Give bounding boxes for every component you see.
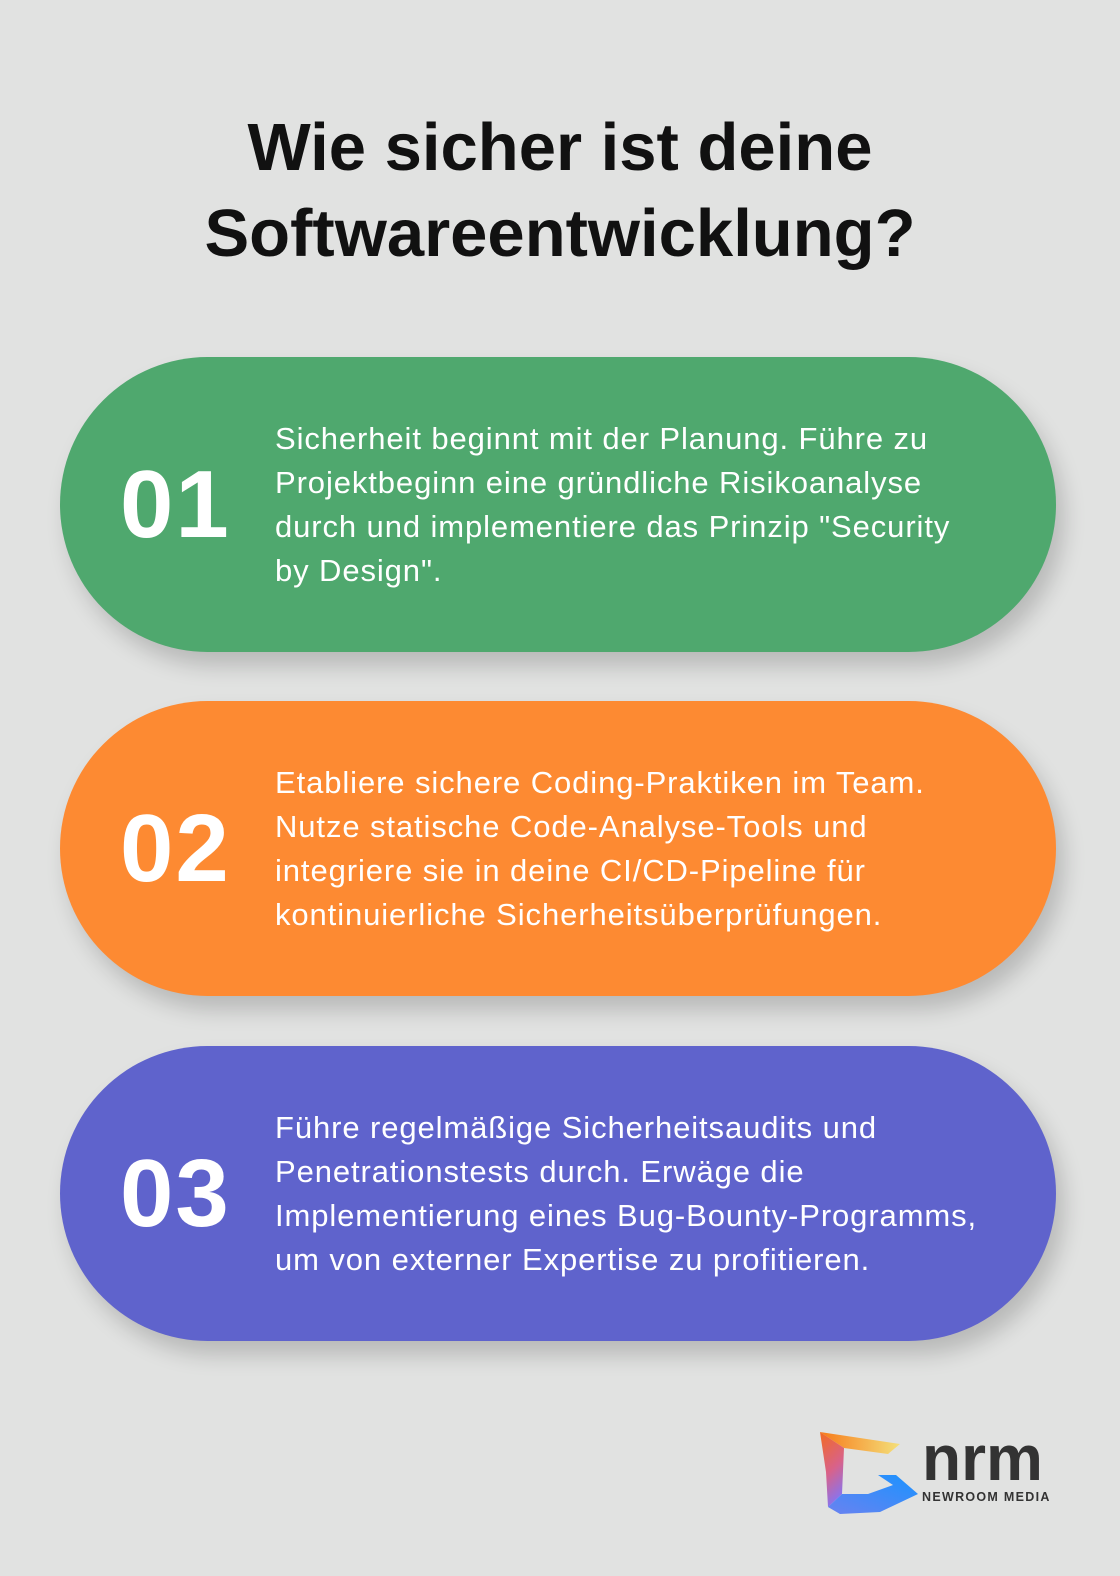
text 03: um von externer Expertise zu profitieren.	[275, 1242, 870, 1276]
text 01: Sicherheit beginnt mit der Planung. Führe zu	[275, 420, 928, 456]
text 02: kontinuierliche Sicherheitsüberprüfungen.	[275, 896, 882, 932]
text 01	[275, 420, 950, 588]
text 02: Nutze statische Code-Analyse-Tools und	[275, 808, 868, 844]
icon: logo mark	[820, 1432, 918, 1514]
number 01: 01	[120, 451, 231, 558]
text 03	[275, 1110, 977, 1276]
text 02: Etabliere sichere Coding-Praktiken im Team.	[275, 764, 925, 800]
panel: step 01	[60, 357, 1056, 652]
logo text newroom media: NEWROOM MEDIA	[922, 1490, 1051, 1504]
title: Wie sicher ist deine	[248, 110, 872, 185]
text 01: durch und implementiere das Prinzip "Security	[275, 508, 950, 544]
text 03: Penetrationstests durch. Erwäge die	[275, 1154, 804, 1188]
number 02: 02	[120, 795, 231, 902]
text 01: Projektbeginn eine gründliche Risikoanalyse	[275, 464, 922, 500]
logo	[820, 1422, 1051, 1514]
number 03: 03	[120, 1140, 231, 1247]
text 03: Führe regelmäßige Sicherheitsaudits und	[275, 1110, 877, 1144]
text 02: integriere sie in deine CI/CD-Pipeline für	[275, 852, 866, 888]
text 03: Implementierung eines Bug-Bounty-Programms,	[275, 1198, 977, 1232]
title: Softwareentwicklung?	[204, 196, 916, 271]
title	[204, 110, 916, 271]
text 01: by Design".	[275, 552, 442, 588]
panel: step 03	[60, 1046, 1056, 1341]
logo text nrm: nrm	[922, 1422, 1043, 1494]
panel: step 02	[60, 701, 1056, 996]
text 02	[275, 764, 925, 932]
